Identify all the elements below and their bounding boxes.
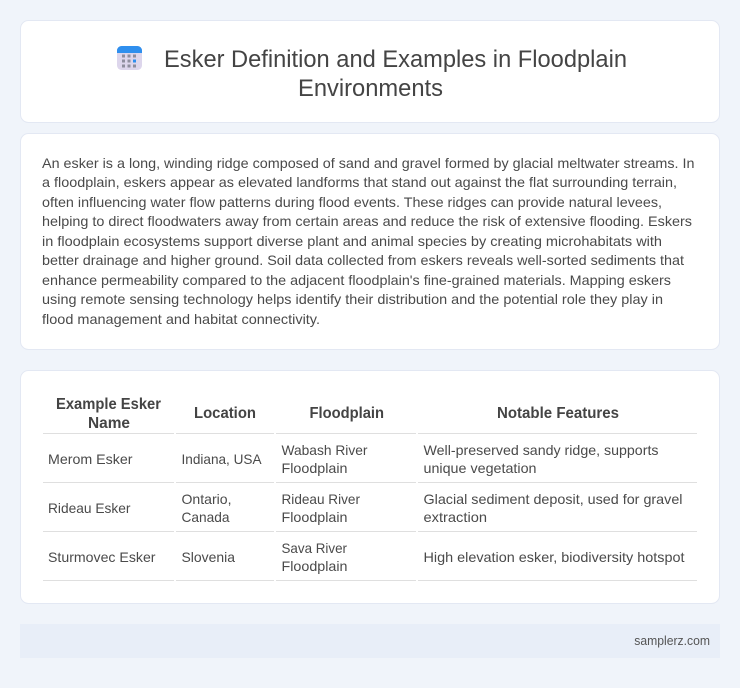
text block: definition paragraph: enhance permeability compared to the adjacent floodplain's fine-grained materials. Mapping eskers [42, 272, 671, 288]
table row: Rideau Esker [48, 491, 682, 525]
table header row [56, 396, 619, 432]
table row: Rideau Esker: Canada [182, 509, 230, 525]
icon: calendar [117, 46, 142, 70]
table row: Merom Esker: Wabash River [282, 442, 368, 458]
table row: Merom Esker: Well-preserved sandy ridge, supports [424, 442, 658, 458]
footer credit: samplerz.com [634, 634, 710, 648]
heading: Environments [298, 75, 443, 102]
panel: definition [20, 134, 720, 350]
table row: Rideau Esker: Glacial sediment deposit, used for gravel [424, 491, 682, 507]
text block: definition paragraph: a floodplain, eskers appear as elevated landforms that stand out against the flat surrounding terrain, [42, 174, 677, 190]
table row: Merom Esker: Merom Esker [48, 451, 133, 467]
table header row: Example Esker [56, 396, 161, 413]
table header row: Notable Features [497, 405, 619, 422]
table row: Rideau Esker: Rideau Esker [48, 500, 131, 516]
table row: Sturmovec Esker: High elevation esker, biodiversity hotspot [424, 549, 685, 565]
table row: Sturmovec Esker [48, 540, 685, 574]
panel: examples table [20, 370, 720, 604]
heading [164, 46, 627, 102]
heading: Esker Definition and Examples in Floodplain [164, 46, 627, 73]
table row: Rideau Esker: Floodplain [282, 509, 348, 525]
table row: Merom Esker: Indiana, USA [182, 451, 262, 467]
table row: Rideau Esker: Ontario, [182, 491, 232, 507]
table row: Rideau Esker: Rideau River [282, 491, 360, 507]
footer bar [20, 624, 720, 658]
text block: definition paragraph: better drainage and higher ground. Soil data collected from eskers reveals well-sorted sediments that [42, 252, 684, 268]
table row: Sturmovec Esker: Slovenia [182, 549, 235, 565]
table row: Merom Esker: unique vegetation [424, 460, 536, 476]
table header row: Location [194, 405, 256, 422]
text block: definition paragraph [42, 155, 694, 327]
text block: definition paragraph: flood management and habitat connectivity. [42, 311, 320, 327]
table header row: Name [88, 415, 130, 432]
table row: Rideau Esker: extraction [424, 509, 487, 525]
text block: definition paragraph: using remote sensing technology helps identify their distribution and the potential role they play in [42, 291, 663, 307]
text block: definition paragraph: An esker is a long, winding ridge composed of sand and gravel formed by glacial meltwater streams. In [42, 155, 694, 171]
table row: Merom Esker [48, 442, 658, 476]
table row: Sturmovec Esker: Floodplain [282, 558, 348, 574]
text block: definition paragraph: helping to direct floodwaters away from certain areas and reduce the risk of extensive flooding. Eskers [42, 213, 692, 229]
table header row: Floodplain [310, 405, 384, 422]
panel: title card [20, 20, 720, 122]
text block: definition paragraph: often influencing water flow patterns during flood events. These ridges can provide natural levees, [42, 194, 662, 210]
table row: Merom Esker: Floodplain [282, 460, 348, 476]
text block: definition paragraph: in floodplain ecosystems support diverse plant and animal species by creating microhabitats with [42, 233, 662, 249]
table row: Sturmovec Esker: Sturmovec Esker [48, 549, 156, 565]
table row: Sturmovec Esker: Sava River [282, 540, 347, 556]
